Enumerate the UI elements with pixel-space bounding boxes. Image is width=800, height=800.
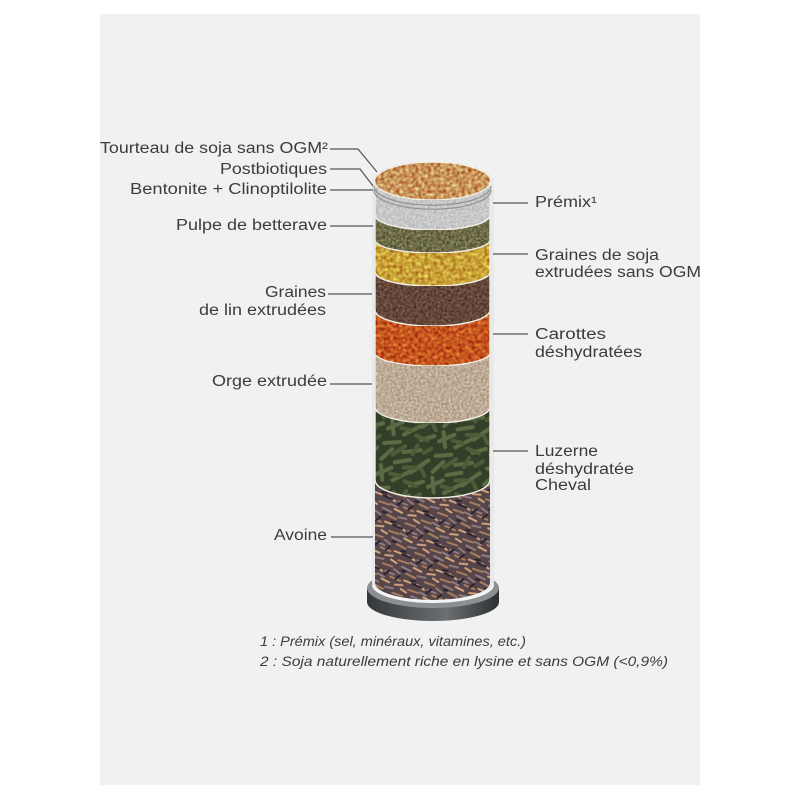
layer: avoine xyxy=(375,470,490,600)
labels left xyxy=(100,140,328,544)
layer: prémix xyxy=(375,180,490,230)
label: tourteau: Tourteau de soja sans OGM² xyxy=(100,140,328,157)
label: extrudées sans OGM: extrudées sans OGM xyxy=(535,264,701,281)
label: postbiotiques: Postbiotiques xyxy=(220,161,327,178)
glass cylinder xyxy=(372,178,494,600)
label: de lin extrudées: de lin extrudées xyxy=(199,302,326,319)
footnote 2: 2 : Soja naturellement riche en lysine et sans OGM (<0,9%) xyxy=(259,653,668,669)
stacked ingredients column xyxy=(367,162,499,621)
label: déshydratée: déshydratée xyxy=(535,461,634,478)
label: graines de lin: Graines xyxy=(265,284,326,301)
leader lines xyxy=(328,149,528,537)
label: prémix: Prémix¹ xyxy=(535,194,597,211)
label: orge: Orge extrudée xyxy=(212,373,327,390)
label: cheval: Cheval xyxy=(535,477,591,494)
label: luzerne: Luzerne xyxy=(535,443,598,460)
layer: graines de soja xyxy=(375,232,490,286)
label: déshydratées: déshydratées xyxy=(535,344,642,361)
top layer: tourteau de soja xyxy=(374,162,490,200)
layer: orge extrudée xyxy=(375,345,490,423)
label: avoine: Avoine xyxy=(274,527,327,544)
layer: graines de lin xyxy=(375,265,490,326)
label: pulpe: Pulpe de betterave xyxy=(176,217,327,234)
layer: carottes xyxy=(375,300,490,366)
label: bentonite: Bentonite + Clinoptilolite xyxy=(130,181,327,198)
footnotes xyxy=(259,633,668,669)
labels right xyxy=(535,194,701,494)
glass rim xyxy=(374,186,491,209)
layer: pulpe de betterave xyxy=(375,208,490,253)
footnote 1: 1 : Prémix (sel, minéraux, vitamines, etc.) xyxy=(260,633,526,649)
base plate xyxy=(367,567,499,621)
layer: luzerne xyxy=(375,400,490,498)
label: carottes: Carottes xyxy=(535,326,606,343)
label: graines de soja: Graines de soja xyxy=(535,247,659,264)
background panel xyxy=(100,14,700,785)
